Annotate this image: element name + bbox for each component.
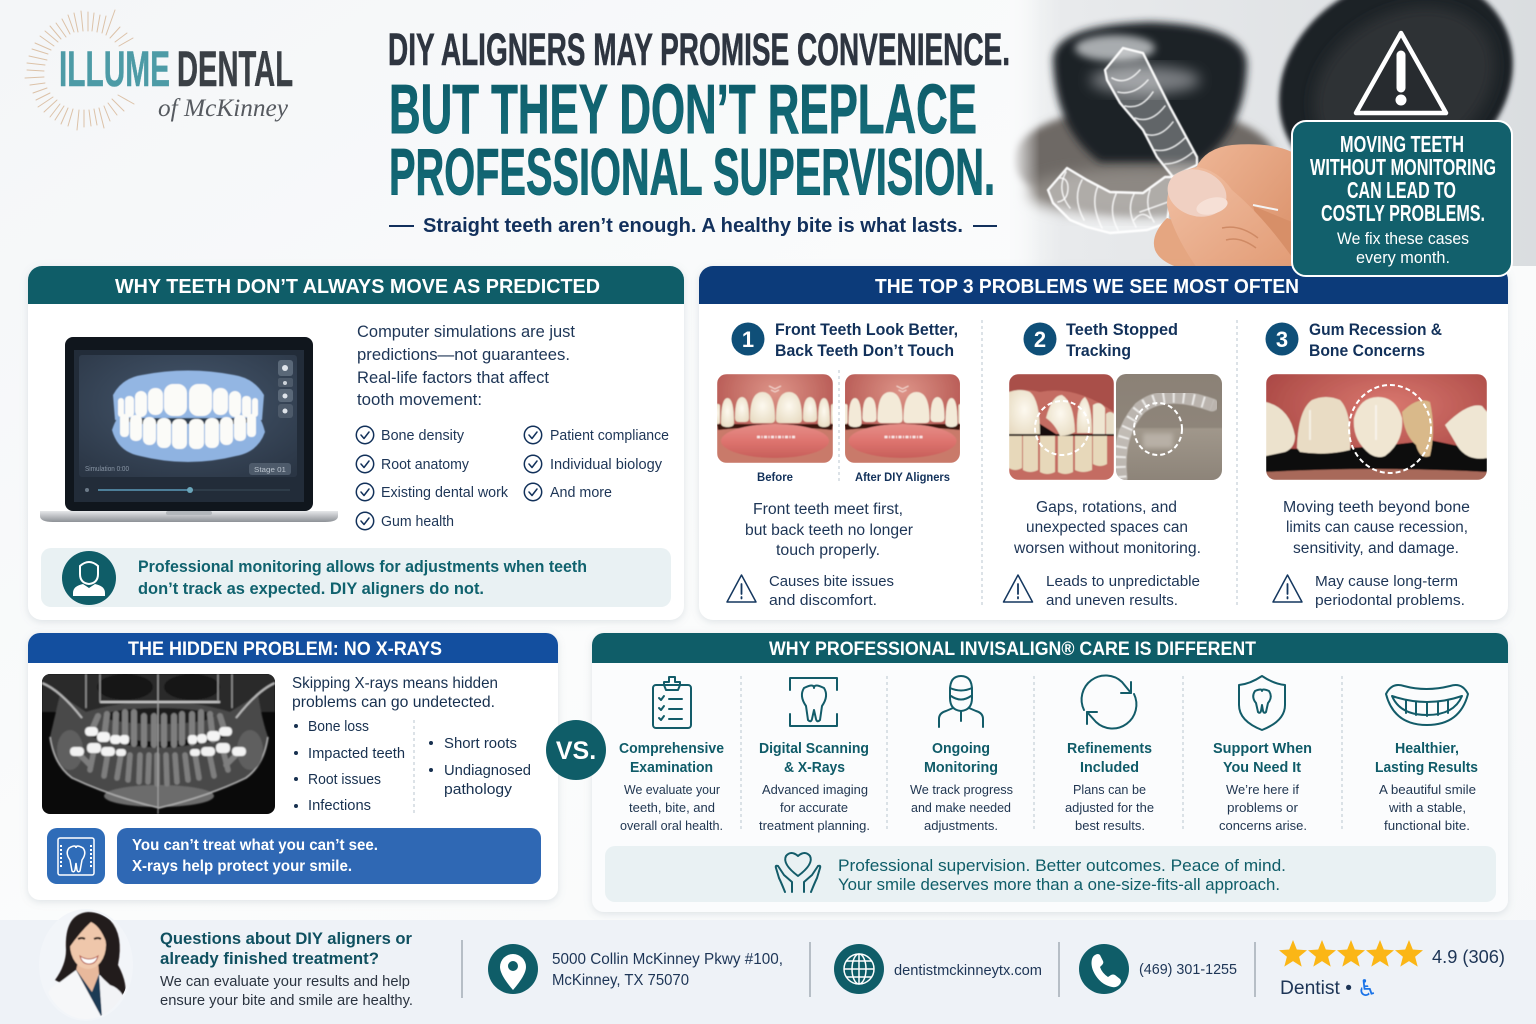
number badge 2: [1024, 322, 1056, 356]
panel: top 3 problems: [699, 266, 1508, 620]
x-ray intro text: problems can go undetected.: [292, 694, 495, 711]
warning note: May cause long-term: [1315, 573, 1458, 590]
feature: digital scanning: [759, 678, 870, 833]
number badge 1: [732, 322, 764, 356]
x-ray intro text: [292, 675, 498, 711]
undetected problems list: Root issues: [308, 772, 381, 788]
callout: professional supervision: [605, 846, 1496, 902]
website: [834, 944, 1042, 994]
photo captions: Before: [757, 470, 793, 484]
callout: costly problems: We fix these cases: [1337, 230, 1469, 248]
feature: comprehensive examination: overall oral health.: [620, 818, 723, 833]
warning note: Leads to unpredictable: [1046, 573, 1200, 590]
callout: costly problems: CAN LEAD TO: [1347, 177, 1456, 203]
feature: healthier lasting results: Healthier,: [1395, 741, 1459, 757]
icon: globe: [834, 944, 884, 994]
address: 5000 Collin McKinney Pkwy #100,: [552, 951, 783, 968]
feature: digital scanning: for accurate: [780, 800, 848, 815]
feature: ongoing monitoring: We track progress: [910, 782, 1013, 797]
feature: support when you need it: We’re here if: [1226, 782, 1299, 797]
number badge 2: 2: [1034, 327, 1046, 352]
number badge 3: [1266, 322, 1298, 356]
header photo: aligner held in hand with case: [1010, 0, 1536, 268]
callout: professional supervision: Your smile deserves more than a one-size-fits-all approach.: [838, 875, 1280, 894]
photo captions: After DIY Aligners: [855, 470, 950, 484]
intro text: [357, 322, 575, 409]
problem 2 description: Gaps, rotations, and: [1036, 499, 1177, 516]
warning note: [1273, 573, 1465, 609]
laptop with tooth simulation: [40, 337, 338, 522]
footer contact band: [0, 909, 1536, 1024]
warning note: [727, 573, 894, 609]
icon: phone: [1079, 944, 1129, 994]
checklist of factors: Root anatomy: [381, 457, 470, 473]
clear aligner: [1048, 48, 1197, 233]
problem 3 description: [1283, 499, 1470, 557]
questions text: already finished treatment?: [160, 949, 379, 968]
upper white crowns: [85, 727, 232, 744]
checklist of factors: Bone density: [381, 428, 465, 444]
feature: comprehensive examination: We evaluate your: [624, 782, 721, 797]
before photo: [715, 374, 836, 463]
intro text: Real-life factors that affect: [357, 368, 549, 387]
panel header: [28, 633, 558, 663]
problem 2 title: [1066, 321, 1178, 360]
number badge 3: 3: [1276, 327, 1288, 352]
questions text: ensure your bite and smile are healthy.: [160, 992, 413, 1009]
panel header: [28, 266, 684, 304]
warning triangle icon: [1356, 33, 1446, 113]
star rating: [1279, 940, 1505, 1002]
vs badge: VS.: [556, 737, 596, 765]
undetected problems list: Impacted teeth: [308, 746, 405, 762]
main headline: [388, 24, 1010, 208]
callout: can't treat what you can't see: X-rays help protect your smile.: [132, 858, 352, 875]
main headline: PROFESSIONAL SUPERVISION.: [389, 134, 995, 208]
star rating: Dentist •: [1280, 978, 1352, 999]
problem 3: [1266, 321, 1487, 609]
callout: professional monitoring: [41, 548, 671, 607]
vs badge: [546, 720, 606, 780]
callout: costly problems: every month.: [1356, 249, 1450, 267]
tagline: Straight teeth aren’t enough. A healthy bite is what lasts.: [423, 214, 963, 237]
undetected problems list: Undiagnosed: [444, 763, 531, 779]
problem 3 description: Moving teeth beyond bone: [1283, 499, 1470, 516]
panoramic x-ray: [42, 674, 275, 814]
undetected problems list: [294, 719, 531, 814]
problem 2 description: [1013, 499, 1201, 557]
misaligned teeth photo: [1009, 374, 1114, 480]
feature: refinements included: Included: [1080, 760, 1139, 776]
feature: refinements included: Plans can be: [1073, 782, 1146, 797]
icon: dental professional: [939, 676, 983, 727]
problem 1 description: touch properly.: [776, 542, 880, 559]
panel header: [699, 266, 1508, 304]
feature: healthier lasting results: A beautiful smile: [1379, 782, 1476, 797]
problem 2 title: Teeth Stopped: [1066, 321, 1178, 339]
warning note: Causes bite issues: [769, 573, 894, 590]
logo wordmark: ILLUME: [59, 41, 170, 97]
logo sunburst rays: [25, 10, 134, 130]
logo: DENTAL: [177, 41, 293, 97]
questions text: We can evaluate your results and help: [160, 973, 410, 990]
problem 3 description: sensitivity, and damage.: [1293, 540, 1459, 557]
problem 3 title: Gum Recession &: [1309, 321, 1442, 339]
icon: refresh arrows: [1082, 676, 1136, 728]
photo captions: [757, 470, 950, 484]
feature: digital scanning: & X-Rays: [784, 760, 845, 776]
checklist of factors: Existing dental work: [381, 485, 509, 501]
callout: professional supervision: Professional supervision. Better outcomes. Peace of mind.: [838, 856, 1286, 875]
problem 2 title: Tracking: [1066, 342, 1131, 360]
problem 1 description: [745, 501, 913, 559]
feature: refinements included: Refinements: [1067, 741, 1152, 757]
checklist of factors: Gum health: [381, 514, 454, 530]
checklist of factors: Individual biology: [550, 457, 663, 473]
gum recession photo: [1266, 374, 1487, 480]
problem 1 description: but back teeth no longer: [745, 522, 913, 539]
warning note: and uneven results.: [1046, 592, 1178, 609]
after DIY aligners photo: [842, 374, 964, 463]
intro text: tooth movement:: [357, 390, 482, 409]
simulator controls: Simulation 0:00: [85, 466, 129, 473]
intro text: Computer simulations are just: [357, 322, 575, 341]
problem 1: [715, 321, 964, 609]
feature: ongoing monitoring: Ongoing: [932, 741, 990, 757]
feature: refinements included: [1065, 676, 1154, 833]
panel: why professional invisalign care is different: [592, 633, 1508, 912]
feature: support when you need it: [1213, 676, 1312, 833]
warning note: [1004, 573, 1200, 609]
main headline: BUT THEY DON’T REPLACE: [389, 70, 977, 148]
feature: support when you need it: Support When: [1213, 741, 1312, 757]
simulator controls: Stage 01: [254, 467, 286, 474]
undetected problems list: pathology: [444, 782, 513, 798]
problem 1 title: Back Teeth Don’t Touch: [775, 342, 954, 360]
logo: of McKinney: [158, 95, 289, 122]
aligner tray photo: [1116, 374, 1222, 480]
problem 1 title: [775, 321, 958, 360]
callout: professional monitoring: Professional monitoring allows for adjustments when teeth: [138, 557, 587, 576]
icon: scan frame with tooth: [790, 678, 837, 726]
feature: digital scanning: Digital Scanning: [759, 741, 869, 757]
icon: hands holding heart: [776, 853, 820, 892]
icon: shield with tooth: [1239, 676, 1285, 730]
problem 2 description: worsen without monitoring.: [1013, 540, 1201, 557]
panel header: THE TOP 3 PROBLEMS WE SEE MOST OFTEN: [875, 275, 1299, 298]
panel header: [592, 633, 1508, 663]
problem 3 title: Bone Concerns: [1309, 342, 1425, 360]
feature: refinements included: best results.: [1075, 818, 1145, 833]
upper roots: [91, 712, 225, 745]
feature: ongoing monitoring: adjustments.: [924, 818, 998, 833]
panel header: WHY PROFESSIONAL INVISALIGN® CARE IS DIFFERENT: [769, 639, 1256, 660]
callout: can't treat what you can't see: [117, 828, 541, 884]
feature: healthier lasting results: functional bite.: [1384, 818, 1470, 833]
intro text: predictions—not guarantees.: [357, 345, 570, 364]
feature: support when you need it: You Need It: [1223, 760, 1301, 776]
problem 2 description: unexpected spaces can: [1026, 519, 1188, 536]
simulated teeth: [112, 370, 265, 462]
icon: tooth x-ray film: [47, 828, 105, 884]
feature: ongoing monitoring: and make needed: [911, 800, 1011, 815]
warning note: periodontal problems.: [1315, 592, 1465, 609]
undetected problems list: Short roots: [444, 736, 517, 752]
panel: hidden problem no x-rays: [28, 633, 558, 900]
address: [488, 944, 783, 994]
feature: ongoing monitoring: Monitoring: [924, 760, 998, 776]
dentist portrait: [54, 910, 126, 1016]
lower roots: [77, 750, 239, 784]
phone: [1079, 944, 1237, 994]
undetected problems list: Bone loss: [308, 719, 369, 735]
five stars: [1279, 940, 1423, 967]
phone: (469) 301-1255: [1139, 961, 1237, 978]
feature: refinements included: adjusted for the: [1065, 800, 1154, 815]
icon: smile: [1386, 685, 1468, 725]
lower white crowns: [70, 743, 246, 756]
checklist of factors: Patient compliance: [550, 428, 669, 444]
x-ray intro text: Skipping X-rays means hidden: [292, 675, 498, 692]
icon: dentist: [62, 551, 116, 605]
simulator controls: [85, 360, 293, 493]
checklist of factors: [356, 426, 669, 530]
feature: digital scanning: Advanced imaging: [762, 782, 868, 797]
questions text: [160, 929, 413, 1009]
undetected problems list: Infections: [308, 798, 371, 814]
feature: support when you need it: problems or: [1227, 800, 1299, 815]
feature: comprehensive examination: [619, 677, 724, 833]
callout: professional monitoring: don’t track as expected. DIY aligners do not.: [138, 579, 484, 598]
feature: comprehensive examination: Examination: [630, 760, 713, 776]
feature: comprehensive examination: Comprehensive: [619, 741, 724, 757]
feature: healthier lasting results: with a stable,: [1388, 800, 1466, 815]
icon: location pin: [488, 944, 538, 994]
problem 2: [1004, 321, 1222, 609]
number badge 1: 1: [742, 327, 754, 352]
main headline: DIY ALIGNERS MAY PROMISE CONVENIENCE.: [388, 24, 1010, 75]
problem 1 description: Front teeth meet first,: [753, 501, 903, 518]
feature: digital scanning: treatment planning.: [759, 818, 870, 833]
icon: accessibility: ♿: [1357, 976, 1378, 1002]
feature: healthier lasting results: Lasting Results: [1375, 760, 1478, 776]
feature: comprehensive examination: teeth, bite, and: [629, 800, 715, 815]
feature: healthier lasting results: [1375, 685, 1478, 833]
icon: clipboard: [653, 677, 691, 728]
panel header: WHY TEETH DON’T ALWAYS MOVE AS PREDICTED: [115, 275, 600, 298]
problem 1 title: Front Teeth Look Better,: [775, 321, 958, 339]
questions text: Questions about DIY aligners or: [160, 929, 412, 948]
hand holding aligner: [1154, 144, 1292, 268]
callout: can't treat what you can't see: You can’t treat what you can’t see.: [132, 837, 378, 854]
feature: support when you need it: concerns arise.: [1219, 818, 1307, 833]
website: dentistmckinneytx.com: [894, 963, 1042, 979]
problem 3 description: limits can cause recession,: [1286, 519, 1468, 536]
star rating: 4.9 (306): [1432, 946, 1505, 967]
checklist of factors: And more: [550, 485, 612, 501]
callout: costly problems: [1292, 121, 1512, 276]
warning note: and discomfort.: [769, 592, 877, 609]
callout: costly problems: MOVING TEETH: [1340, 131, 1464, 157]
feature: ongoing monitoring: [910, 676, 1013, 833]
problem 3 title: [1309, 321, 1442, 360]
address: McKinney, TX 75070: [552, 972, 689, 989]
logo: [25, 10, 293, 130]
panel: why teeth don't always move as predicted: [28, 266, 684, 620]
panel header: THE HIDDEN PROBLEM: NO X-RAYS: [128, 639, 442, 660]
